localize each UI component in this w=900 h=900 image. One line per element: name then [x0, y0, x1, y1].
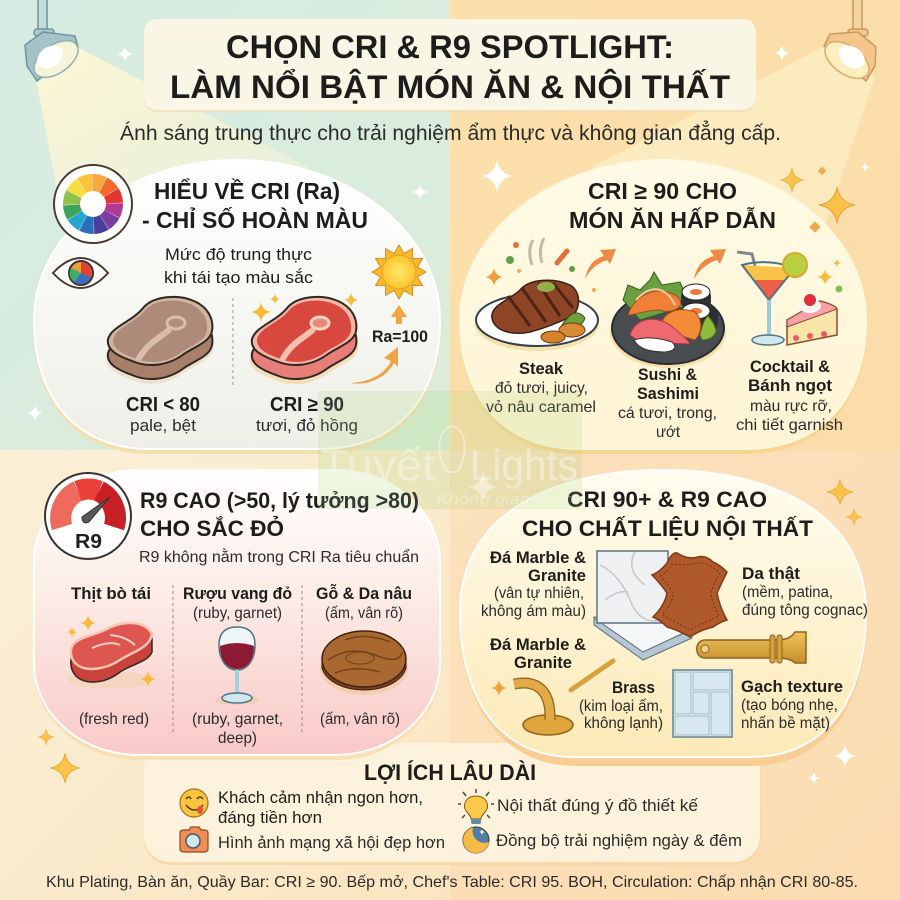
sparkles on food — [817, 259, 842, 292]
label: CRI ≥ 90 — [256, 394, 358, 435]
icon: brass bar — [697, 632, 806, 663]
arrow: sushi to cocktail — [694, 249, 726, 279]
icon: right spotlight — [818, 0, 876, 86]
divider — [232, 298, 234, 386]
sparkles on fresh steak — [251, 293, 358, 322]
description: Mức độ trung thực — [165, 245, 313, 264]
label: tile: nhấn bề mặt) — [741, 715, 830, 732]
icon: camera — [180, 827, 208, 852]
background sparkles — [27, 45, 870, 784]
heading: materials: CHO CHẤT LIỆU NỘI THẤT — [522, 516, 814, 541]
icon: cocktail — [737, 252, 807, 345]
title text: CHỌN CRI & R9 SPOTLIGHT: — [226, 29, 674, 65]
label: sushi: ướt — [656, 424, 681, 441]
watermark: - Không gian chất — [425, 491, 571, 508]
watermark: Tuyết — [320, 441, 435, 490]
heading: benefits: LỢI ÍCH LÂU DÀI — [364, 760, 536, 785]
label: marble 1 — [481, 548, 586, 620]
label: marble 1: không ám màu) — [481, 603, 586, 620]
left spotlight beam — [35, 47, 310, 195]
icon: moon — [463, 827, 489, 853]
label: steak: đỏ tươi, juicy, — [495, 380, 588, 397]
footer note: Khu Plating, Bàn ăn, Quầy Bar: CRI ≥ 90. Bếp mở, Chef's Table: CRI 95. BOH, Circulation: Chấp nhận CRI 80-85. — [46, 874, 858, 891]
panel: food — [459, 160, 867, 454]
label: steak — [486, 359, 596, 416]
panel: R9 — [33, 470, 441, 760]
label: sushi — [618, 365, 717, 441]
heading: materials: CRI 90+ & R9 CAO — [567, 487, 767, 512]
label: marble 2 — [490, 635, 586, 672]
arrow: up to sun — [391, 305, 407, 324]
label: brass: Brass — [612, 678, 655, 697]
Ra=100 label: Ra=100 — [372, 327, 428, 346]
label: tile: (tạo bóng nhẹ, — [741, 697, 838, 714]
heading: food: CRI ≥ 90 CHO — [588, 178, 737, 204]
label: marble 1: Granite — [528, 566, 586, 585]
icon: wood disc — [320, 631, 408, 695]
title panel — [144, 19, 756, 112]
label: leather: (mềm, patina, — [742, 584, 833, 601]
watermark: Lights — [470, 441, 578, 490]
panel: CRI explanation — [33, 160, 441, 454]
label: leather: Da thật — [742, 564, 800, 583]
label: sushi: Sushi & — [638, 365, 697, 384]
column: raw beef — [67, 584, 156, 728]
icon: sushi plate — [610, 272, 726, 368]
icon: R9 gauge: R9 — [75, 531, 102, 553]
column: red wine: (ruby, garnet) — [193, 605, 282, 622]
heading: R9: CHO SẮC ĐỎ — [140, 516, 284, 541]
column: wood and leather — [316, 584, 412, 728]
icon: fresh steak — [250, 297, 358, 384]
label: brass: không lạnh) — [584, 715, 663, 732]
heading: CRI — [142, 177, 368, 233]
sparkle — [491, 680, 507, 696]
icon: leather hide — [652, 553, 727, 637]
column: red wine — [183, 584, 292, 747]
panel: long-term benefits — [144, 743, 761, 865]
column: raw beef: (fresh red) — [79, 711, 149, 728]
column dividers — [173, 585, 302, 735]
heading: R9 — [140, 488, 419, 541]
label: sushi: Sashimi — [637, 384, 699, 403]
heading: R9: R9 CAO (>50, lý tưởng >80) — [140, 488, 419, 513]
title text — [170, 29, 730, 105]
label: steak: Steak — [519, 359, 564, 378]
icon: bulb — [458, 789, 494, 824]
label: cocktail: Bánh ngọt — [748, 376, 832, 395]
label: marble 2: Granite — [514, 653, 572, 672]
label: steak: vỏ nâu caramel — [486, 399, 596, 416]
icon: marble slab — [594, 551, 692, 660]
description — [164, 245, 314, 287]
icon: raw beef — [68, 623, 152, 689]
sparkles — [67, 615, 156, 687]
icon: wine glass — [215, 627, 259, 705]
label: tile: Gạch texture — [741, 677, 843, 696]
description: khi tái tạo màu sắc — [164, 268, 314, 287]
icon: left spotlight — [25, 0, 85, 85]
panel: materials — [459, 470, 868, 766]
label: CRI < 80: pale, bệt — [130, 416, 196, 435]
title text: LÀM NỔI BẬT MÓN ĂN & NỘI THẤT — [170, 69, 730, 105]
benefit text: taste — [218, 788, 423, 827]
right spotlight beam — [590, 47, 875, 235]
label: CRI < 80 — [126, 394, 200, 435]
label: leather: đúng tông cognac) — [742, 602, 868, 619]
label: tile — [741, 677, 843, 732]
column: wood and leather: Gỗ & Da nâu — [316, 584, 412, 603]
watermark — [318, 391, 582, 509]
icon: color wheel — [54, 165, 132, 243]
column: red wine: (ruby, garnet, — [192, 711, 283, 728]
icon: sun — [372, 245, 426, 299]
icon: smiley — [180, 789, 208, 817]
icon: tile — [673, 670, 732, 737]
arrow: steak to sushi — [585, 249, 616, 279]
subtitle: Ánh sáng trung thực cho trải nghiệm ẩm thực và không gian đẳng cấp. — [120, 121, 781, 145]
column: wood and leather: (ấm, vân rõ) — [320, 711, 400, 728]
label: sushi: cá tươi, trong, — [618, 405, 717, 422]
label: brass — [579, 678, 663, 732]
label: marble 1: (vân tự nhiên, — [494, 585, 584, 602]
heading: CRI: HIỂU VỀ CRI (Ra) — [154, 177, 340, 204]
R9 note: R9 không nằm trong CRI Ra tiêu chuẩn — [139, 547, 419, 566]
icon: steam and garnish — [485, 238, 596, 292]
heading: food: MÓN ĂN HẤP DẪN — [569, 205, 776, 233]
label: CRI ≥ 90: CRI ≥ 90 — [270, 394, 344, 416]
label: marble 2: Đá Marble & — [490, 635, 586, 654]
column: raw beef: Thịt bò tái — [71, 584, 151, 603]
label: cocktail — [736, 357, 843, 434]
label: marble 1: Đá Marble & — [490, 548, 586, 567]
heading: CRI: - CHỈ SỐ HOÀN MÀU — [142, 205, 368, 233]
icon: brass rod — [571, 661, 613, 690]
column: red wine: Rượu vang đỏ — [183, 584, 292, 603]
icon: pale steak — [106, 297, 214, 384]
heading: materials — [522, 487, 814, 541]
benefit text: taste: Khách cảm nhận ngon hơn, — [218, 788, 423, 807]
icon: brass hook — [514, 683, 573, 735]
label: cocktail: Cocktail & — [750, 357, 830, 376]
label: CRI ≥ 90: tươi, đỏ hồng — [256, 416, 358, 435]
benefit text: interior: Nội thất đúng ý đồ thiết kế — [497, 796, 699, 815]
column: red wine: deep) — [218, 730, 257, 747]
heading: food — [569, 178, 776, 233]
label: cocktail: chi tiết garnish — [736, 417, 843, 434]
benefit text: social: Hình ảnh mạng xã hội đẹp hơn — [218, 833, 445, 852]
label: CRI < 80: CRI < 80 — [126, 394, 200, 416]
column: wood and leather: (ấm, vân rõ) — [325, 605, 403, 622]
label: brass: (kim loại ấm, — [579, 698, 663, 715]
icon: steak plate — [475, 280, 599, 351]
icon: cake — [787, 294, 837, 345]
arrow: curved to Ra=100 — [350, 347, 398, 384]
icon: eye — [53, 258, 108, 288]
label: cocktail: màu rực rỡ, — [750, 398, 832, 415]
benefit text: taste: đáng tiền hơn — [218, 808, 322, 827]
icon: R9 gauge — [45, 473, 131, 559]
benefit text: day and night: Đồng bộ trải nghiệm ngày & đêm — [496, 831, 742, 850]
label: leather — [742, 564, 868, 619]
